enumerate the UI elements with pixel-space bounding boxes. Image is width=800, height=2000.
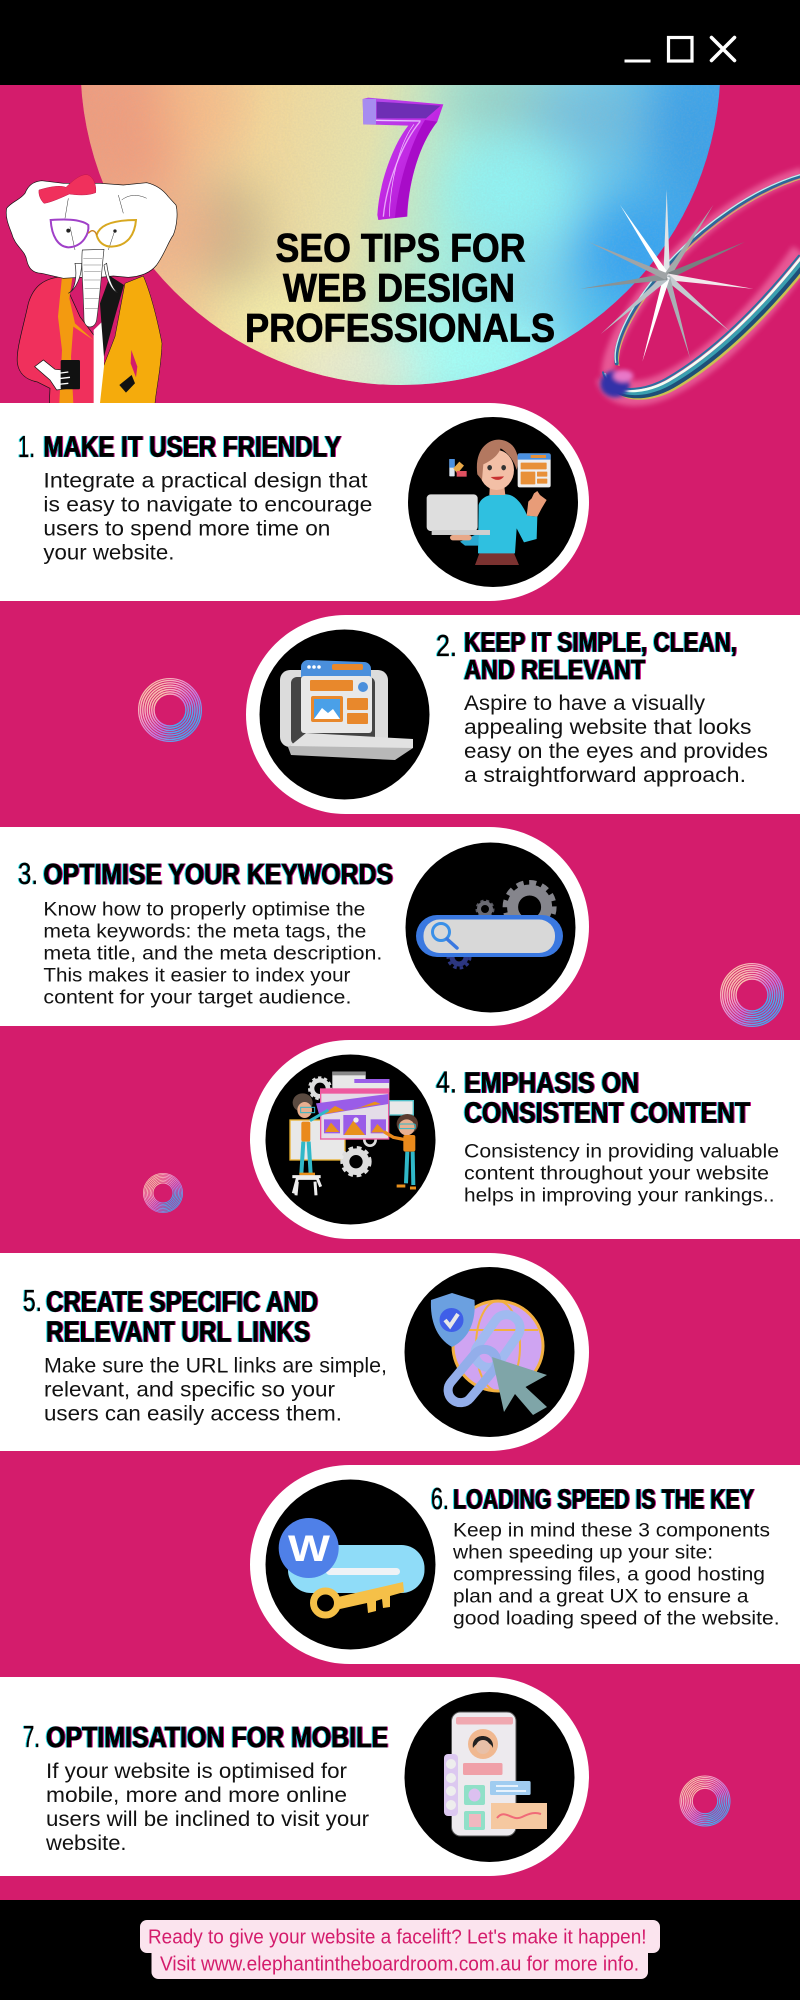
circle illustration 4 [266,1054,436,1224]
circle illustration 1 [408,417,578,587]
heading 7: OPTIMISATION FOR MOBILE [46,1722,388,1754]
body 3: Know how to properly optimise the [43,899,365,921]
heading 1: MAKE IT USER FRIENDLY [43,432,341,464]
call to action: Ready to give your website a facelift? Let's make it happen! [148,1926,646,1948]
body 1: users to spend more time on [43,517,330,540]
top window bar [0,0,800,85]
panel: tip 1 [0,403,589,601]
body 1: your website. [43,541,174,564]
number 6: 6. [431,1481,449,1516]
body 5: Make sure the URL links are simple, [44,1354,387,1377]
panel: tip 2 [246,615,800,814]
body 6: good loading speed of the website. [453,1608,780,1630]
body 6 [452,1520,780,1630]
heading 4: EMPHASIS ON [464,1068,639,1100]
decorative ring: row 3 [721,964,783,1026]
heading 5: CREATE SPECIFIC AND [46,1286,318,1318]
heading 4 [464,1068,750,1130]
numeral 7 [363,98,443,220]
body 2: easy on the eyes and provides [464,740,768,763]
body 4: content throughout your website [464,1162,769,1184]
body 2: a straightforward approach. [464,764,746,787]
number 3: 3. [18,856,38,891]
circle illustration 5 [404,1267,574,1437]
heading 4: CONSISTENT CONTENT [464,1098,750,1130]
call to action: Visit www.elephantintheboardroom.com.au for more info. [160,1954,639,1976]
decorative ring: row 4 [143,1173,183,1213]
body 4 [464,1141,779,1206]
body 4: helps in improving your rankings.. [464,1184,774,1206]
body 5 [44,1354,387,1425]
body 3: meta keywords: the meta tags, the [43,920,366,942]
circle illustration 2 [260,630,430,800]
circle illustration 6 [266,1480,436,1650]
heading 2: AND RELEVANT [464,654,645,685]
title [245,227,555,351]
body 4: Consistency in providing valuable [464,1141,779,1163]
heading 5 [46,1286,318,1349]
body 7: If your website is optimised for [46,1760,347,1783]
panel: tip 6 [250,1465,800,1664]
body 6: compressing files, a good hosting [453,1564,765,1586]
holographic hero circle [80,60,726,391]
heading 2 [464,627,737,685]
body 3: This makes it easier to index your [43,964,351,986]
body 7: mobile, more and more online [46,1784,347,1807]
body 1 [43,469,372,564]
heading 2: KEEP IT SIMPLE, CLEAN, [464,627,737,658]
body 7 [45,1760,369,1855]
holographic ring [600,173,800,398]
body 5: users can easily access them. [44,1402,342,1425]
number 7: 7. [23,1719,40,1754]
body 2: Aspire to have a visually [464,692,706,715]
sparkle star [579,189,754,363]
icon: elephant character [6,175,177,403]
title: SEO TIPS FOR [276,227,526,271]
call to action [140,1920,660,1979]
title: WEB DESIGN [283,267,515,311]
icon: close [712,38,734,60]
body 1: is easy to navigate to encourage [43,493,372,516]
number 4: 4. [436,1065,457,1100]
footer bar [0,1900,800,2000]
number 2: 2. [436,628,457,663]
body 2 [464,692,768,787]
icon: minimise [624,60,650,62]
body 3 [43,899,382,1008]
body 7: website. [45,1832,126,1855]
panel: tip 4 [250,1040,800,1239]
body 6: Keep in mind these 3 components [453,1520,770,1542]
number 1: 1. [18,429,35,464]
panel: tip 5 [0,1253,589,1451]
decorative ring: row 2 [139,679,201,741]
body 2: appealing website that looks [464,716,752,739]
body 7: users will be inclined to visit your [46,1808,369,1831]
panel: tip 3 [0,827,589,1026]
icon: maximise [668,38,692,61]
circle illustration 3 [406,842,576,1012]
body 1: Integrate a practical design that [43,469,368,492]
body 3: content for your target audience. [43,986,351,1008]
body 5: relevant, and specific so your [44,1378,335,1401]
body 3: meta title, and the meta description. [43,942,382,964]
title: PROFESSIONALS [245,307,555,351]
circle illustration 7 [404,1692,574,1862]
body 6: when speeding up your site: [452,1542,713,1564]
body 6: plan and a great UX to ensure a [453,1586,749,1608]
number 5: 5. [23,1283,42,1318]
circle illustration 6: W [288,1528,330,1569]
heading 5: RELEVANT URL LINKS [46,1317,310,1349]
decorative ring: row 7 [680,1776,730,1826]
panel: tip 7 [0,1677,589,1876]
heading 3: OPTIMISE YOUR KEYWORDS [43,859,393,891]
